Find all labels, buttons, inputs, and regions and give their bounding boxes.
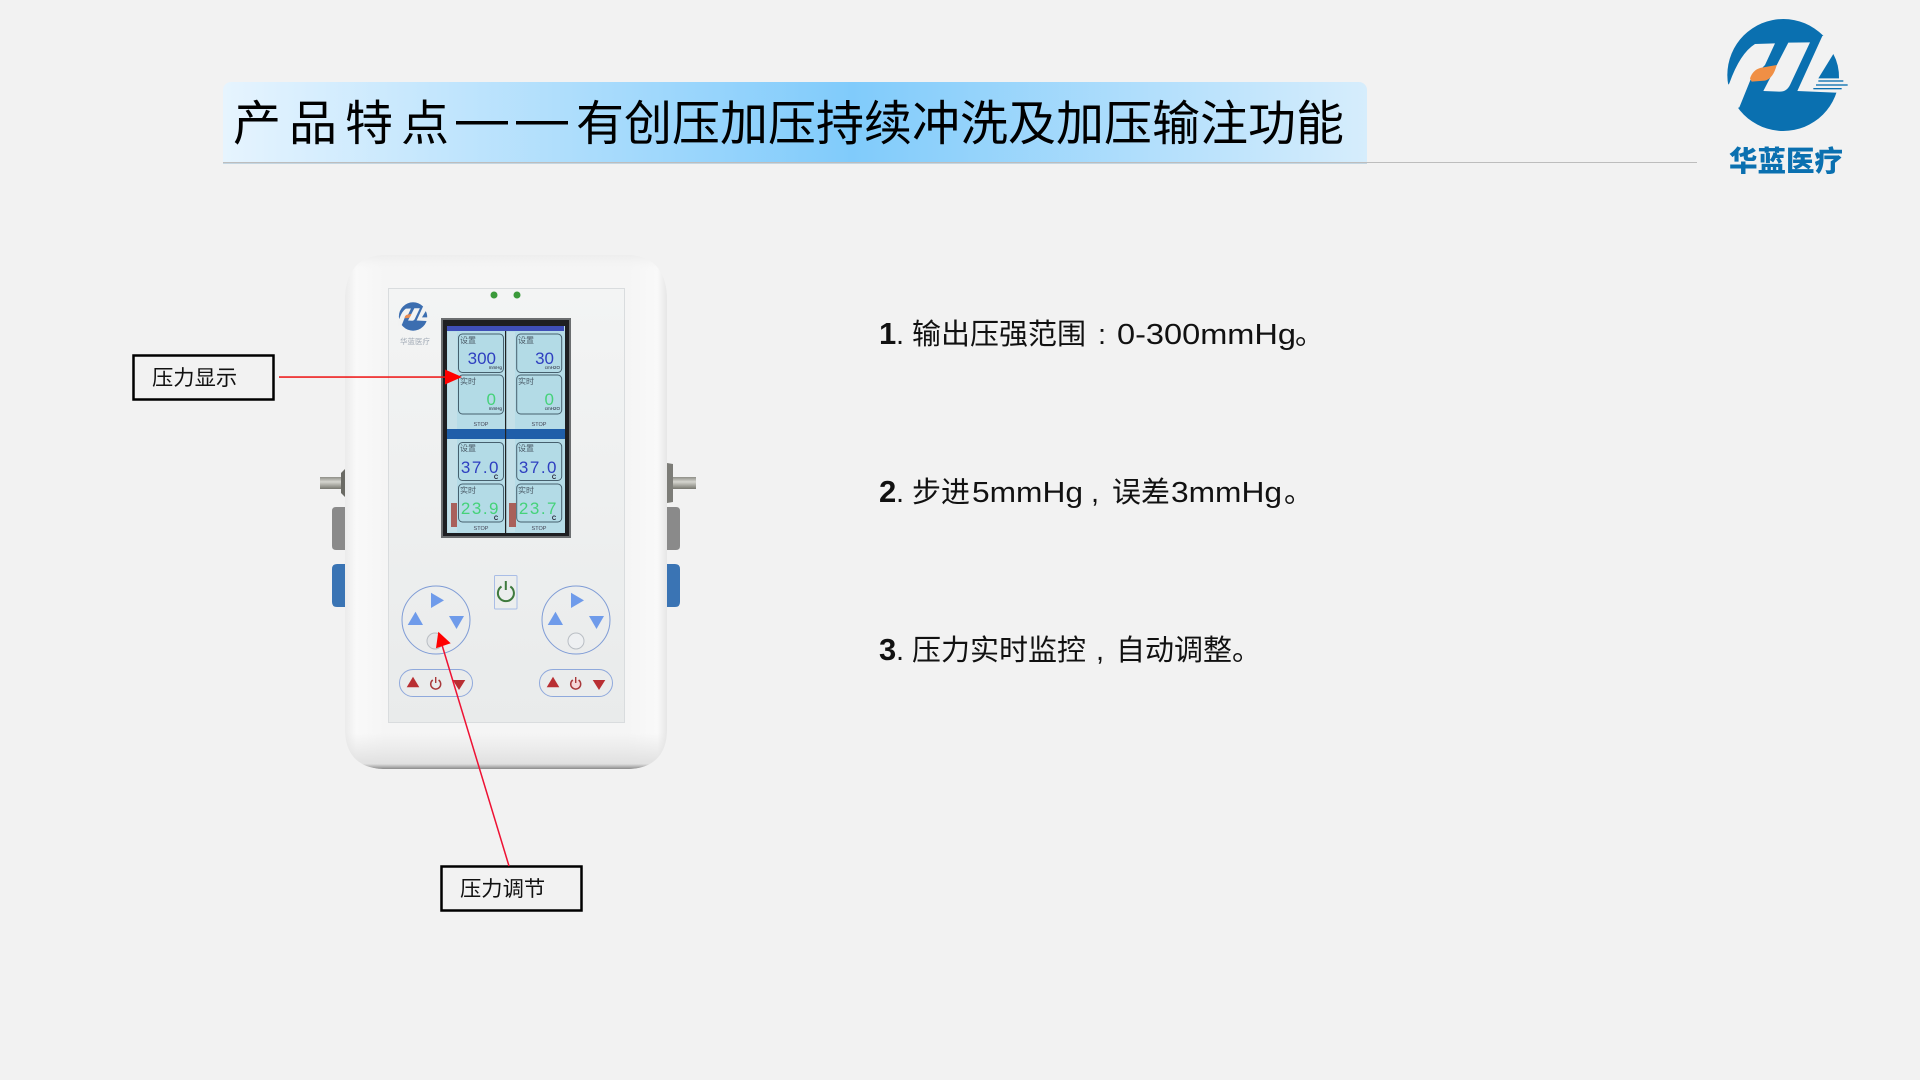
feature 2: 误差 (1112, 476, 1170, 509)
title text: 有创压加压持续冲洗及加压输注功能 (576, 98, 1344, 151)
LCD screen: mmHg (489, 406, 502, 411)
feature 3: 。 (1232, 635, 1261, 667)
LCD small labels: 设置 (518, 335, 534, 345)
title banner (223, 82, 1697, 164)
LCD screen: 0 (545, 390, 554, 409)
feature 2: 。 (1284, 477, 1313, 509)
logo mark (1727, 19, 1848, 131)
small logo (398, 302, 431, 346)
feature 2 (879, 474, 1313, 509)
LCD screen: STOP (532, 526, 547, 532)
callout: pressure display (134, 356, 274, 400)
LCD readings: 37.0 (519, 458, 558, 477)
title text: 产 (233, 98, 281, 151)
LCD screen: C (552, 516, 557, 522)
left pill buttons (400, 670, 472, 696)
right fittings (667, 463, 696, 607)
small logo: 华蓝医疗 (400, 336, 430, 346)
left fittings (320, 469, 345, 607)
feature 1: 0-300mmHg (1117, 319, 1296, 351)
LCD screen: STOP (474, 526, 489, 532)
feature 1 (879, 316, 1324, 351)
LCD screen: STOP (532, 422, 547, 428)
title text (233, 98, 1344, 151)
LCD screen: C (494, 475, 499, 481)
feature 3: 压力实时监控 (912, 634, 1086, 667)
feature 2: 5mmHg (972, 477, 1083, 509)
temperature bars (451, 503, 516, 527)
front panel (388, 288, 624, 722)
LCD screen: cmH2O (545, 406, 560, 411)
LCD screen (441, 318, 571, 538)
LCD small labels: 设置 (460, 335, 476, 345)
LCD screen: C (494, 516, 499, 522)
LCD small labels: 实时 (518, 485, 534, 495)
LCD small labels: 设置 (518, 443, 534, 453)
power button (494, 576, 517, 609)
device body (345, 255, 667, 769)
status LEDs (490, 292, 520, 298)
LCD small labels: 实时 (460, 485, 476, 495)
feature 3: 3 (879, 632, 896, 667)
feature 3: , (1096, 635, 1104, 667)
LCD screen: 0 (487, 390, 496, 409)
logo text: 华蓝医疗 (1729, 146, 1843, 178)
LCD screen: STOP (474, 422, 489, 428)
feature 3: . (896, 635, 904, 667)
callout: pressure adjustment: 压力调节 (460, 877, 545, 901)
LCD small labels: 设置 (460, 443, 476, 453)
feature 1: : (1098, 319, 1106, 351)
LCD small labels (460, 335, 534, 495)
right control pad (542, 586, 610, 654)
feature 1: 输出压强范围 (912, 318, 1086, 351)
LCD cells (458, 334, 562, 522)
title text: 点 (401, 98, 449, 151)
LCD screen: 23.9 (461, 499, 500, 518)
callout: pressure display: 压力显示 (152, 366, 237, 390)
callout: pressure adjustment (442, 866, 582, 910)
right pill buttons (540, 670, 612, 696)
title text: 特 (345, 98, 393, 151)
feature 1: . (896, 319, 904, 351)
title text: 品 (289, 98, 337, 151)
LCD readings: 30 (535, 349, 554, 368)
feature 2: 步进 (912, 476, 970, 509)
feature 2: 2 (879, 474, 896, 509)
left control pad (402, 586, 470, 654)
LCD readings (461, 349, 558, 477)
arrow: to control pad (436, 632, 509, 866)
LCD screen: cmH2O (545, 365, 560, 370)
LCD readings: 37.0 (461, 458, 500, 477)
LCD readings: 300 (468, 349, 496, 368)
feature 2: 3mmHg (1171, 477, 1282, 509)
feature 2: , (1091, 477, 1099, 509)
logo (1723, 19, 1853, 178)
feature 1: 。 (1295, 319, 1324, 351)
LCD screen: C (552, 475, 557, 481)
feature 3 (879, 632, 1261, 667)
feature 3: 自动调整 (1116, 634, 1232, 667)
LCD small labels: 实时 (518, 376, 534, 386)
arrow: to screen (279, 370, 462, 384)
LCD screen: 23.7 (519, 499, 558, 518)
LCD small labels: 实时 (460, 376, 476, 386)
feature 1: 1 (879, 316, 896, 351)
device illustration (320, 255, 696, 769)
feature 2: . (896, 477, 904, 509)
LCD screen: mmHg (489, 365, 502, 370)
